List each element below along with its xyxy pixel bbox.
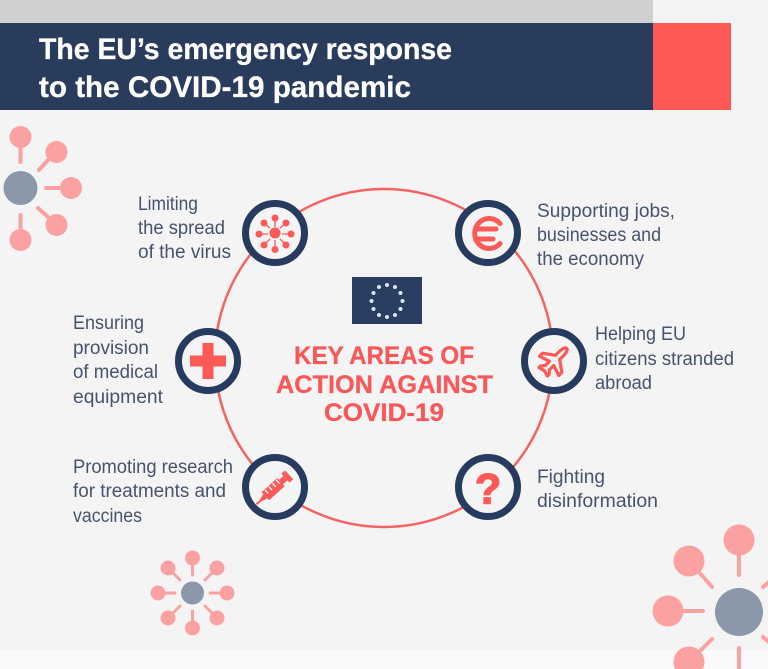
text: supporting jobs: businesses and bbox=[537, 225, 661, 246]
text: fighting disinformation: disinformation bbox=[537, 491, 658, 512]
central heading: COVID-19 bbox=[324, 399, 444, 427]
text: fighting disinformation bbox=[537, 467, 658, 512]
title bbox=[39, 33, 452, 104]
text: limiting the spread: Limiting bbox=[138, 194, 198, 215]
EU flag bbox=[352, 277, 422, 324]
text: promoting research: Promoting research bbox=[73, 457, 233, 478]
text: medical equipment bbox=[73, 313, 164, 408]
text: supporting jobs bbox=[537, 201, 675, 270]
icon: medical cross bbox=[178, 332, 238, 390]
central heading: ACTION AGAINST bbox=[276, 371, 493, 399]
text: limiting the spread: of the virus bbox=[138, 242, 231, 263]
text: medical equipment: of medical bbox=[73, 362, 158, 383]
central heading bbox=[276, 342, 493, 427]
text: limiting the spread bbox=[138, 194, 231, 263]
icon: euro bbox=[458, 204, 518, 262]
decorative virus: top left bbox=[4, 126, 82, 251]
title: to the COVID-19 pandemic bbox=[39, 71, 411, 104]
text: medical equipment: provision bbox=[73, 338, 149, 359]
text: helping citizens: citizens stranded bbox=[595, 349, 734, 370]
decorative virus: bottom centre bbox=[150, 550, 234, 636]
text: promoting research: vaccines bbox=[73, 506, 142, 527]
title: The EU’s emergency response bbox=[39, 33, 452, 66]
text: fighting disinformation: Fighting bbox=[537, 467, 605, 488]
central heading: KEY AREAS OF bbox=[294, 342, 474, 370]
main circle bbox=[215, 189, 553, 527]
icon: plane bbox=[524, 332, 584, 390]
text: supporting jobs: the economy bbox=[537, 249, 644, 270]
text: promoting research: for treatments and bbox=[73, 481, 226, 502]
text: helping citizens: abroad bbox=[595, 373, 652, 394]
text: limiting the spread: the spread bbox=[138, 218, 225, 239]
icon: virus bbox=[246, 204, 304, 262]
text: helping citizens bbox=[595, 324, 734, 394]
text: helping citizens: Helping EU bbox=[595, 324, 686, 345]
header band bbox=[0, 0, 731, 110]
icon: question mark: ? bbox=[475, 466, 501, 514]
decorative virus: bottom right bbox=[652, 524, 768, 669]
icon: question mark bbox=[458, 458, 518, 516]
icon: syringe bbox=[246, 458, 304, 516]
text: supporting jobs: Supporting jobs, bbox=[537, 201, 675, 222]
text: medical equipment: Ensuring bbox=[73, 313, 144, 334]
text: medical equipment: equipment bbox=[73, 387, 164, 408]
text: promoting research bbox=[73, 457, 233, 527]
